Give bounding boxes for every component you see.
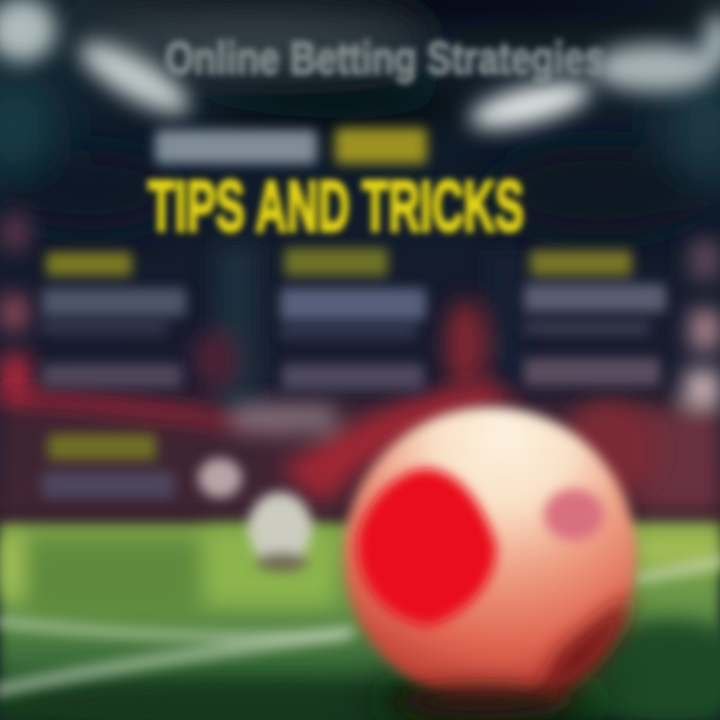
heading: white word xyxy=(155,130,317,164)
title: top line: Online Betting Strategies xyxy=(165,32,605,84)
background: dark clouds xyxy=(0,0,720,235)
pitch: highlights and panels xyxy=(0,530,720,720)
background: stadium sky xyxy=(0,0,720,530)
pitch xyxy=(0,524,720,720)
pitch: white lines xyxy=(0,562,720,690)
column 1 text xyxy=(42,252,186,388)
ball: red patch xyxy=(357,469,496,626)
ball: pink patch xyxy=(544,489,604,541)
column 3 text xyxy=(524,250,666,386)
lower left text block xyxy=(42,434,174,498)
red swoosh across stands xyxy=(0,382,660,505)
small distant ball xyxy=(198,458,312,572)
background: bright clouds xyxy=(0,0,720,137)
stands: red and dark bands xyxy=(0,215,720,515)
ball: shaded edge xyxy=(395,595,635,718)
large red and white football xyxy=(344,407,636,720)
heading: yellow words xyxy=(335,128,427,164)
column 2 text xyxy=(280,248,426,390)
